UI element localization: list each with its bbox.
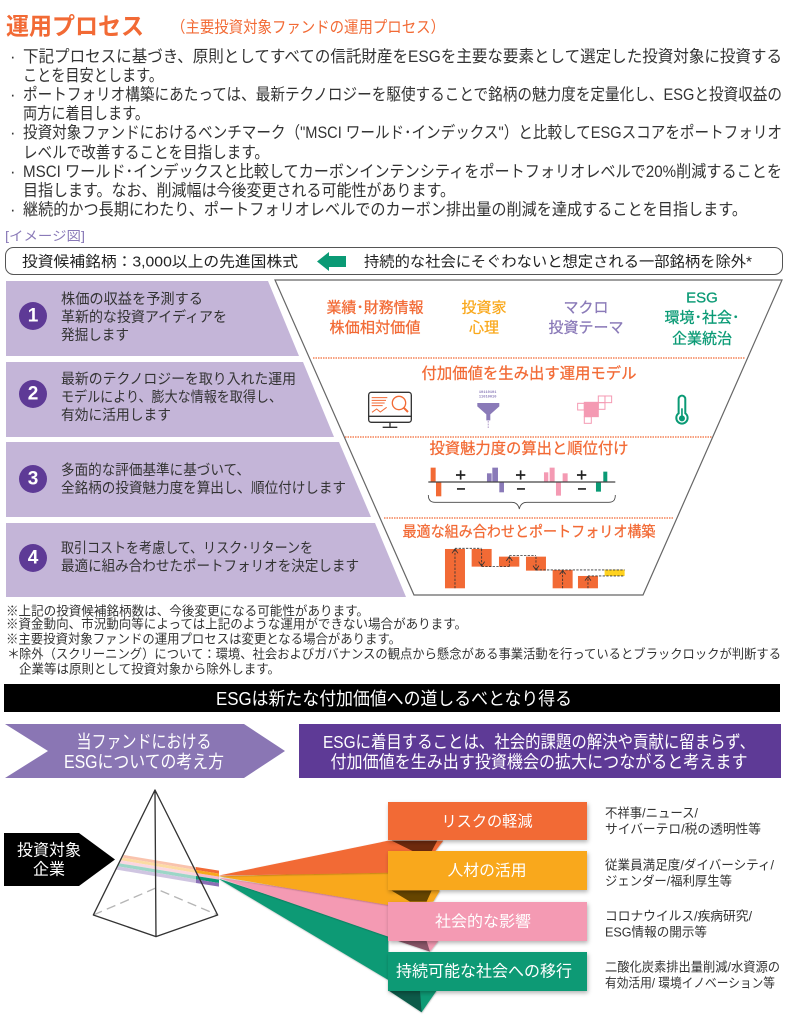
factor: financial: 業績･財務情報 (326, 300, 424, 316)
diagram: spectrum fans (218, 841, 443, 1012)
text block: footnotes: ※資金動向、市況動向等によっては上記のような運用ができない場合があります。 (6, 616, 467, 632)
text block: process bullets: · (10, 86, 16, 104)
panel: step 3: 全銘柄の投資魅力度を算出し、順位付けします (61, 480, 346, 497)
text block: process bullets: レベルで改善することを目指します。 (23, 143, 269, 162)
panel: step 4 (6, 523, 406, 597)
heading: portfolio: 最適な組み合わせとポートフォリオ構築 (402, 522, 656, 540)
text block: footnotes: ※上記の投資候補銘柄数は、今後変更になる可能性があります。 (6, 604, 369, 618)
panel: step 2 (6, 362, 334, 437)
factor: investor sentiment (461, 300, 507, 336)
title: 運用プロセス (6, 14, 144, 40)
text: sustainability examples: 二酸化炭素排出量削減/水資源の (605, 960, 780, 974)
panel: step 1: 革新的な投資アイディアを (61, 308, 227, 326)
panel: step 3: 多面的な評価基準に基づいて、 (61, 461, 250, 479)
universe box: 持続的な社会にそぐわないと想定される一部銘柄を除外* (364, 254, 752, 270)
text: sustainability examples (605, 960, 780, 990)
box: sustainable transition (388, 952, 587, 991)
text: social examples: ESG情報の開示等 (605, 924, 707, 940)
fan: green (218, 879, 437, 1012)
arrow: investee companies: 投資対象 (17, 842, 81, 860)
icon: data funnel: 10110101 (479, 391, 497, 395)
icon: pink squares (578, 396, 612, 423)
panel: step 4: 取引コストを考慮して、リスク･リターンを (61, 540, 313, 557)
universe box: 投資候補銘柄：3,000以上の先進国株式 (22, 254, 298, 270)
chevron: ESG approach label: ESGについての考え方 (64, 752, 224, 772)
text: human capital examples: 従業員満足度/ダイバーシティ/ (605, 858, 774, 872)
panel: step 3: 3 (28, 468, 38, 490)
text: risk examples (605, 806, 761, 836)
factor: ESG (664, 290, 740, 348)
factor: investor sentiment: 投資家 (461, 300, 507, 316)
factor: financial: 株価相対価値 (330, 320, 420, 336)
text block: process bullets: ことを目安とします。 (23, 66, 163, 85)
text block: footnotes: ※主要投資対象ファンドの運用プロセスは変更となる場合があります。 (6, 632, 401, 646)
icon: monitor (369, 392, 411, 427)
text block: process bullets: · (10, 124, 16, 142)
panel: ESG statement (299, 724, 781, 778)
factor: investor sentiment: 心理 (469, 320, 499, 336)
text: sustainability examples: 有効活用/ 環境イノベーション等 (605, 976, 775, 990)
panel: step 2: モデルにより、膨大な情報を取得し、 (61, 388, 282, 406)
banner: ESG heading (4, 684, 780, 712)
panel: funnel (275, 280, 782, 595)
heading: ranking: 投資魅力度の算出と順位付け (430, 440, 628, 458)
text block: process bullets: · (10, 163, 16, 181)
text block: footnotes: 企業等は原則として投資対象から除外します。 (19, 662, 280, 676)
fan: amber (218, 872, 440, 905)
panel: step 2: 2 (28, 384, 38, 404)
box: risk reduction (388, 802, 587, 840)
box: sustainable transition: 持続可能な社会への移行 (396, 962, 572, 980)
panel: ESG statement: 付加価値を生み出す投資機会の拡大につながると考えます (330, 752, 748, 772)
factor: macro: 投資テーマ (548, 320, 624, 336)
chevron: ESG approach label (5, 724, 285, 778)
panel: step 4: 4 (28, 548, 39, 568)
panel: step 2: 有効に活用します (61, 407, 171, 424)
text: social examples (605, 908, 752, 940)
text: human capital examples (605, 858, 774, 888)
text block: footnotes: ＊ (7, 646, 20, 662)
box: social impact: 社会的な影響 (435, 912, 531, 930)
subtitle: （主要投資対象ファンドの運用プロセス） (171, 18, 445, 36)
factor: financial (326, 300, 424, 336)
text block: process bullets (10, 47, 782, 219)
panel: step 3 (6, 442, 371, 517)
factor: macro (548, 300, 624, 336)
text block: process bullets: · (10, 48, 16, 66)
text: human capital examples: ジェンダー/福利厚生等 (605, 874, 732, 888)
factor: ESG: 企業統治 (672, 330, 732, 348)
chart: waterfall (445, 548, 625, 588)
panel: step 4: 最適に組み合わせたポートフォリオを決定します (61, 558, 359, 575)
factor: ESG: ESG (686, 290, 718, 306)
box: human capital: 人材の活用 (448, 862, 526, 880)
chart: plus minus bars (428, 468, 615, 509)
panel: step 1: 株価の収益を予測する (61, 291, 203, 308)
text block: process bullets: 継続的かつ長期にわたり、ポートフォリオレベルでのカーボン排出量の削減を達成することを目指します。 (23, 200, 747, 219)
text block: footnotes (6, 604, 781, 676)
fan: orange (218, 841, 443, 876)
panel: step 1 (6, 281, 299, 356)
panel: step 2: 最新のテクノロジーを取り入れた運用 (61, 371, 296, 388)
text block: process bullets: · (10, 201, 16, 219)
banner: ESG heading: ESGは新たな付加価値への道しるべとなり得る (216, 689, 572, 709)
icon: green arrow (317, 252, 346, 271)
arrow: investee companies: 企業 (33, 860, 65, 878)
box: risk reduction: リスクの軽減 (442, 812, 533, 830)
arrow: investee companies (4, 833, 115, 886)
fan: pink (218, 878, 438, 952)
panel: step 1: 発掘します (61, 327, 129, 344)
icon: data funnel (477, 391, 499, 428)
text: risk examples: 不祥事/ニュース/ (605, 806, 698, 820)
icon: data funnel: 11010010 (479, 396, 496, 400)
chevron: ESG approach label: 当ファンドにおける (76, 732, 212, 752)
panel: step 1: 1 (28, 306, 39, 326)
image caption: [イメージ図] (5, 228, 85, 244)
heading: model: 付加価値を生み出す運用モデル (422, 364, 636, 382)
box: social impact (388, 902, 587, 941)
text: risk examples: サイバーテロ/税の透明性等 (605, 822, 761, 836)
factor: macro: マクロ (563, 300, 609, 316)
icon: thermometer (676, 396, 688, 424)
text block: process bullets: 両方に着目します。 (23, 104, 149, 123)
text block: process bullets: 目指します。なお、削減幅は今後変更される可能性があります。 (23, 181, 455, 200)
factor: ESG: 環境･社会･ (664, 310, 740, 326)
diagram: prism with light bands (93, 790, 219, 937)
universe box (6, 248, 782, 274)
box: human capital (388, 851, 587, 890)
text: social examples: コロナウイルス/疾病研究/ (605, 908, 752, 924)
